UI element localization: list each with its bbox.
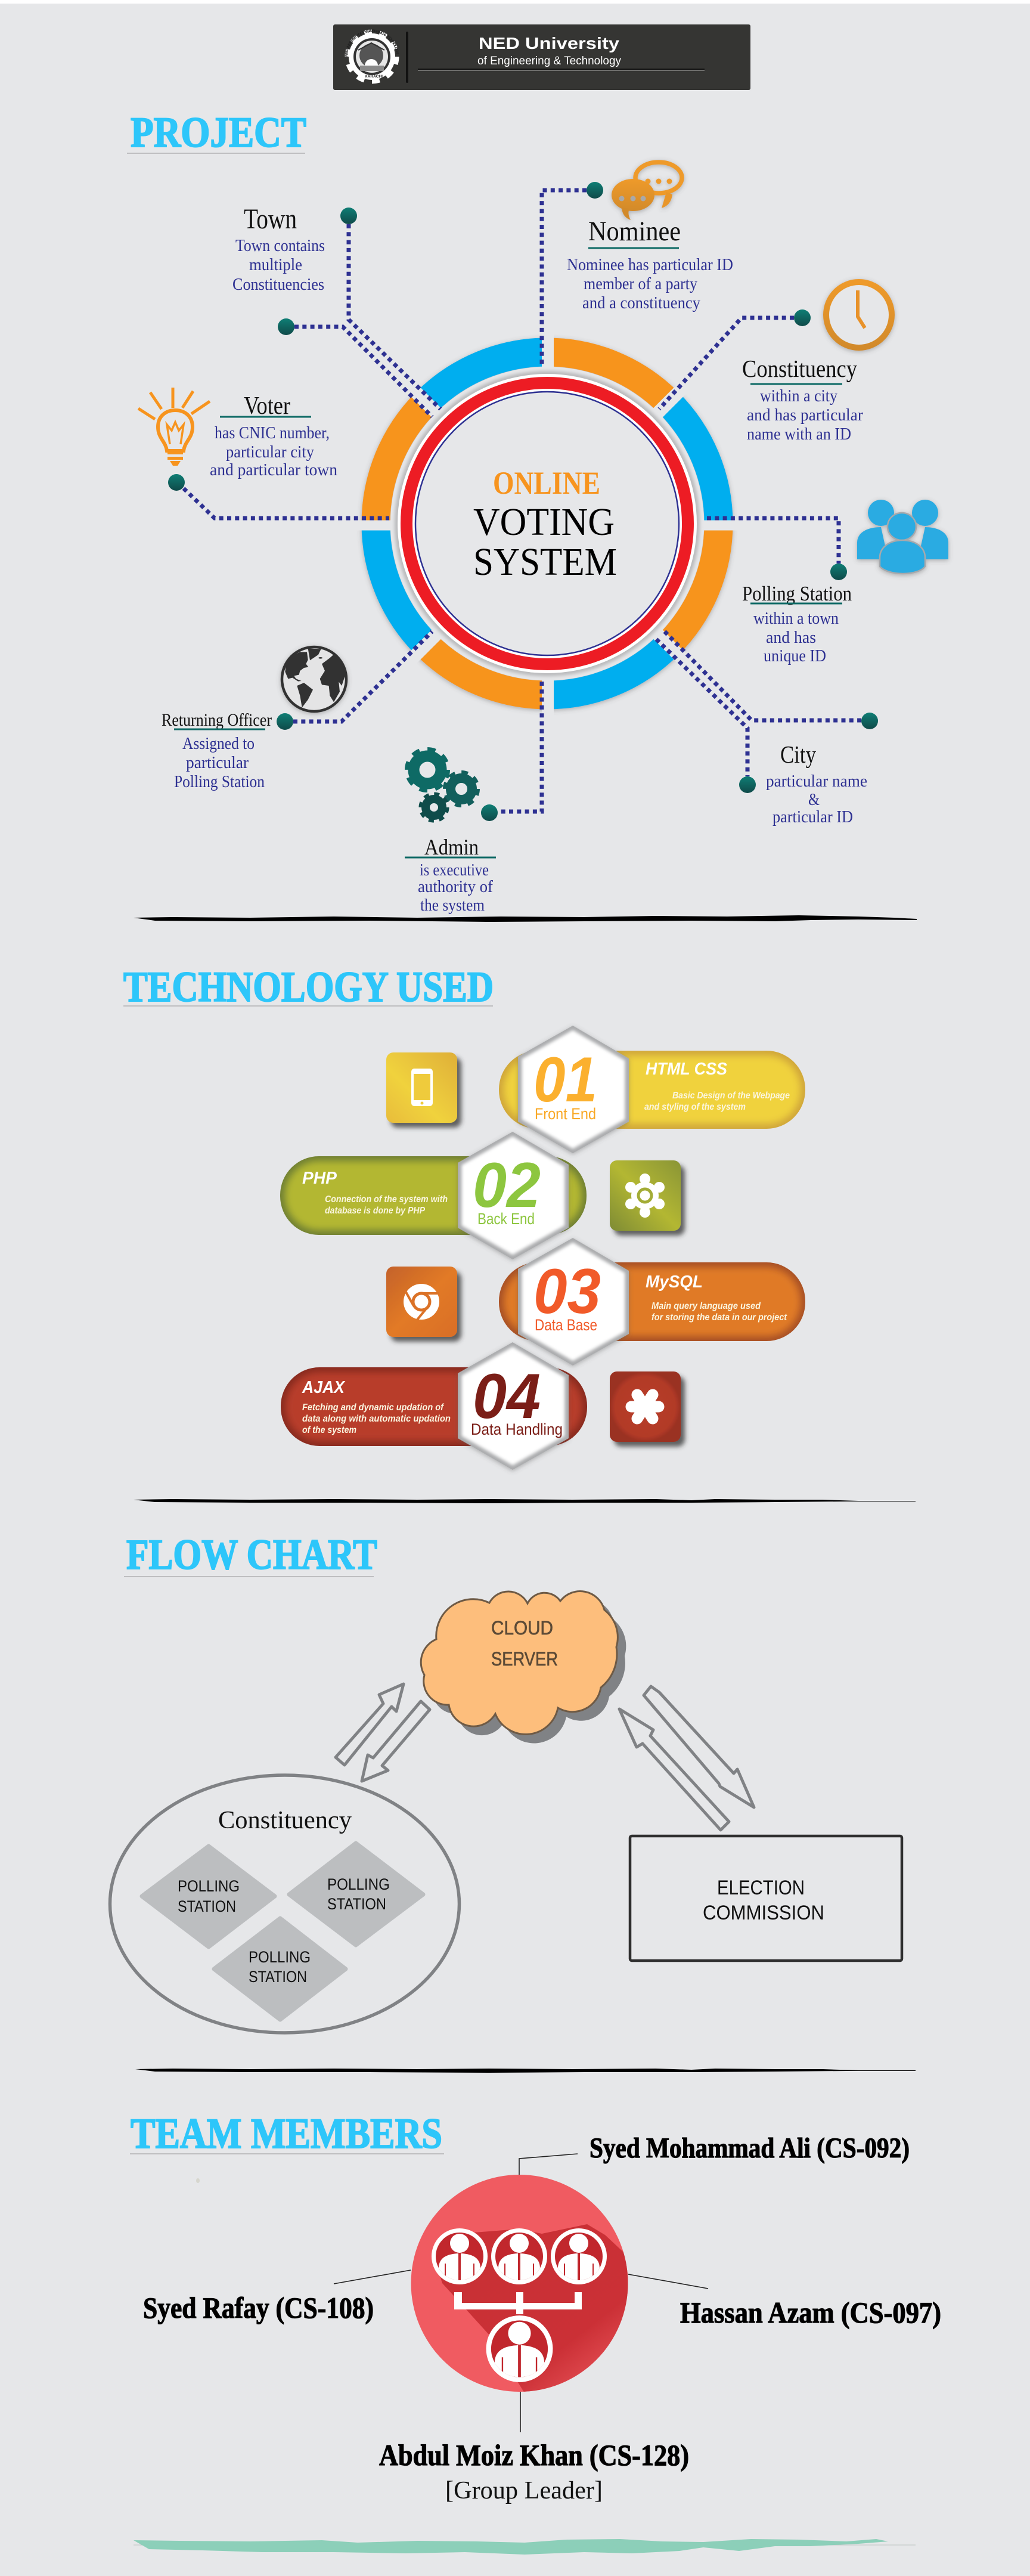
callout: constituency: [659, 282, 892, 444]
polling station 1: POLLING: [178, 1877, 240, 1895]
item 01: html css: [386, 1026, 805, 1153]
arrow: constituency to cloud: [336, 1684, 404, 1765]
section: team members: [130, 2110, 941, 2504]
item 04: ajax: 04: [473, 1360, 541, 1432]
icon: people group: [857, 500, 948, 574]
callout: polling station: and has: [766, 628, 816, 647]
name: syed mohammad ali: Syed Mohammad Ali (CS-092): [590, 2132, 910, 2164]
icon: chat bubbles: [612, 162, 682, 220]
hierarchy connector: [454, 2292, 582, 2314]
callout: voter: Voter: [244, 392, 290, 420]
arrow: cloud to election commission: [644, 1686, 754, 1807]
icon: gears: [408, 750, 477, 821]
callout: admin: [405, 682, 542, 915]
election commission box: COMMISSION: [703, 1902, 824, 1924]
polling station 1: [142, 1846, 275, 1947]
icon: light bulb: [138, 388, 210, 466]
icon tile: gear: [610, 1160, 681, 1231]
callout: returning officer: particular: [186, 753, 249, 772]
section: technology used: [123, 963, 805, 1470]
callout: town: Town: [244, 203, 297, 235]
callout: town: Town contains: [235, 236, 325, 255]
polling station 3: POLLING: [249, 1948, 311, 1966]
callout: nominee: and a constituency: [582, 293, 700, 312]
item 04: ajax: Data Handling: [471, 1420, 563, 1438]
item 03: mysql: for storing the data in our project: [651, 1312, 787, 1323]
callout: nominee: member of a party: [584, 274, 697, 293]
callout: constituency: and has particular: [747, 405, 863, 425]
callout: admin: the system: [420, 896, 485, 915]
polling station 3: [214, 1918, 346, 2020]
callout: returning officer: Returning Officer: [162, 710, 272, 730]
icon: university emblem: KARACHI: [365, 75, 383, 79]
callout: city: particular name: [766, 772, 867, 791]
section: project: [127, 109, 948, 915]
callout: polling station: within a town: [753, 609, 839, 628]
item 01: html css: HTML CSS: [646, 1060, 728, 1079]
heading: team members: TEAM MEMBERS: [131, 2110, 442, 2157]
icon tile: chrome: [386, 1267, 457, 1337]
polling station 3: STATION: [249, 1968, 307, 1986]
icon: university emblem: NED UNIVERSITY OF ENGINEERING & TECHNOLOGY: [345, 30, 399, 57]
ring: online voting system segments: [352, 328, 743, 719]
role: group leader: [Group Leader]: [445, 2477, 603, 2504]
arrow: election commission to cloud: [619, 1709, 729, 1830]
item 04: ajax: Fetching and dynamic updation of: [302, 1402, 445, 1413]
item 01: html css: Basic Design of the Webpage: [672, 1091, 790, 1101]
member icon 1: [434, 2230, 485, 2283]
item 04: ajax: data along with automatic updation: [302, 1414, 451, 1424]
center title: VOTING: [473, 500, 615, 544]
callout: constituency: Constituency: [742, 355, 857, 382]
callout: returning officer: Polling Station: [174, 772, 265, 791]
callout: town: multiple: [249, 255, 302, 274]
heading: technology used: TECHNOLOGY USED: [123, 963, 494, 1011]
callout: city: City: [780, 741, 816, 768]
item 02: php: Connection of the system with: [325, 1194, 448, 1205]
banner title: NED University: [479, 34, 619, 52]
callout: polling station: unique ID: [764, 646, 826, 665]
polling station 2: [289, 1843, 423, 1945]
name: hassan azam: Hassan Azam (CS-097): [680, 2296, 941, 2329]
center title: SYSTEM: [473, 540, 617, 584]
cloud server: [421, 1592, 626, 1743]
icon tile: asterisk: [610, 1371, 681, 1442]
callout: voter: has CNIC number,: [215, 423, 330, 442]
name: syed rafay: Syed Rafay (CS-108): [143, 2291, 374, 2324]
header: NED University banner: [333, 24, 750, 90]
item 01: html css: Front End: [535, 1105, 596, 1123]
item 03: mysql: MySQL: [646, 1272, 703, 1292]
member icon 3: [553, 2230, 604, 2283]
callout: city: [656, 631, 878, 826]
item 02: php: PHP: [302, 1169, 337, 1188]
callout: returning officer: [162, 631, 432, 791]
callout: voter: particular city: [226, 442, 314, 462]
callout: town: [232, 203, 440, 417]
heading: project: PROJECT: [131, 109, 306, 156]
item 03: mysql: 03: [533, 1255, 601, 1327]
item 02: php: 02: [473, 1149, 541, 1221]
item 03: mysql: Main query language used: [651, 1301, 761, 1311]
constituency ellipse: [110, 1775, 459, 2033]
center title: ONLINE: [493, 465, 600, 501]
cloud server: CLOUD: [491, 1617, 553, 1639]
polling station 2: POLLING: [327, 1875, 390, 1893]
section: flow chart: [110, 1531, 902, 2033]
callout: voter: and particular town: [210, 460, 337, 479]
callout: admin: authority of: [418, 877, 493, 896]
leader icon: [489, 2318, 550, 2381]
team circle emblem: [411, 2175, 632, 2394]
election commission box: ELECTION: [717, 1877, 805, 1899]
item 02: php: Back End: [477, 1210, 535, 1228]
callout: constituency: name with an ID: [747, 425, 851, 444]
center title: [473, 465, 617, 584]
banner subtitle: of Engineering & Technology: [477, 55, 621, 67]
name: abdul moiz khan: Abdul Moiz Khan (CS-128): [379, 2438, 689, 2472]
callout: city: particular ID: [772, 807, 853, 826]
icon: university emblem: [345, 30, 399, 83]
callout: nominee: [542, 162, 733, 365]
cloud server: SERVER: [491, 1648, 558, 1670]
item 02: php: [280, 1132, 681, 1259]
item 03: mysql: Data Base: [535, 1316, 597, 1334]
callout: nominee: Nominee: [588, 216, 681, 247]
callout: town: Constituencies: [232, 275, 324, 294]
callout: polling station: [707, 500, 948, 665]
callout: voter: [138, 388, 389, 518]
constituency ellipse: Constituency: [218, 1807, 352, 1834]
arrow: cloud to constituency: [362, 1701, 430, 1781]
member icon 2: [494, 2230, 545, 2283]
callout: polling station: Polling Station: [742, 582, 852, 605]
callout: constituency: within a city: [760, 386, 837, 405]
heading: flow chart: FLOW CHART: [126, 1531, 377, 1578]
icon tile: phone: [386, 1052, 457, 1123]
icon: globe: [282, 647, 346, 711]
item 03: mysql: [386, 1238, 805, 1366]
callout: admin: is executive: [420, 860, 489, 880]
callout: nominee: Nominee has particular ID: [567, 255, 733, 274]
polling station 2: STATION: [327, 1895, 386, 1913]
election commission box: [630, 1836, 902, 1961]
item 04: ajax: [281, 1342, 681, 1470]
icon: clock: [826, 282, 892, 348]
item 02: php: database is done by PHP: [325, 1206, 426, 1216]
callout: returning officer: Assigned to: [182, 734, 255, 753]
item 04: ajax: of the system: [302, 1425, 356, 1435]
callout: city: &: [808, 790, 820, 809]
item 01: html css: and styling of the system: [644, 1102, 746, 1112]
connector lines: [334, 2154, 708, 2432]
item 01: html css: 01: [533, 1044, 597, 1115]
polling station 1: STATION: [178, 1897, 236, 1915]
callout: admin: Admin: [424, 835, 479, 860]
item 04: ajax: AJAX: [302, 1378, 346, 1397]
